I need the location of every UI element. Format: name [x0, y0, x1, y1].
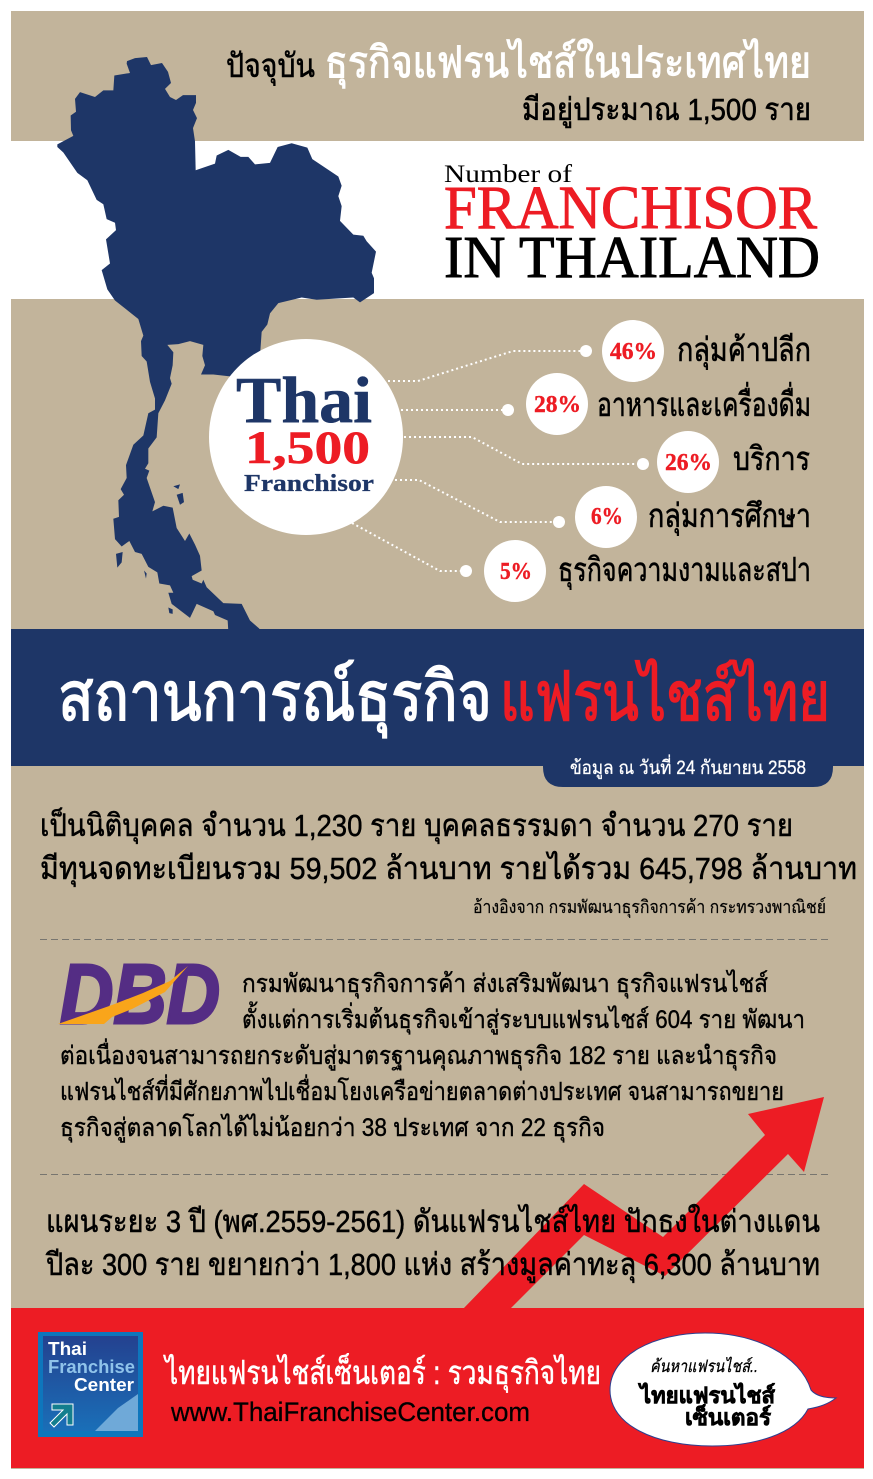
- text block: DBD description: ธุรกิจสู่ตลาดโลกได้ไม่น้อยกว่า 38 ประเทศ จาก 22 ธุรกิจ: [60, 1113, 605, 1143]
- central circle: Thai 1,500 Franchisor: Thai: [236, 364, 372, 437]
- stat: 46% retail: 46%: [610, 339, 657, 365]
- stat: 26% services: 26%: [665, 450, 712, 476]
- arrow: rising red arrow: [463, 1097, 824, 1309]
- stat: 6% education: กลุ่มการศึกษา: [648, 497, 811, 536]
- text block: DBD description: ต่อเนื่องจนสามารถยกระดับสู่มาตรฐานคุณภาพธุรกิจ 182 ราย และนำธุรกิจ: [60, 1038, 777, 1071]
- stat: 5% beauty and spa: 5%: [500, 559, 532, 585]
- callout: speech bubble: เซ็นเตอร์: [685, 1403, 771, 1430]
- title: Thai header: [226, 38, 811, 128]
- text block: DBD description: แฟรนไชส์ที่มีศักยภาพไปเชื่อมโยงเครือข่ายตลาดต่างประเทศ จนสามารถขยาย: [60, 1074, 784, 1106]
- stat: 46% retail: กลุ่มค้าปลีก: [677, 331, 811, 370]
- title: Number of Franchisor in Thailand: [444, 161, 820, 290]
- stat: 46% retail: [602, 320, 811, 382]
- heading: current situation headline: สถานการณ์ธุรกิจ: [58, 659, 492, 738]
- central circle: Thai 1,500 Franchisor: Franchisor: [244, 471, 374, 497]
- panel: red footer band: [11, 1308, 864, 1468]
- callout: speech bubble: ค้นหาแฟรนไชส์..: [650, 1356, 758, 1376]
- icon: Thai Franchise Center logo: Thai: [48, 1339, 87, 1359]
- icon: Thai Franchise Center logo: Center: [74, 1375, 134, 1395]
- text block: registration and revenue: [40, 807, 857, 918]
- panel: tan details area: [11, 766, 864, 1309]
- text block: DBD description: [60, 969, 805, 1143]
- title: Number of Franchisor in Thailand: FRANCHISOR: [444, 175, 817, 242]
- title: Number of Franchisor in Thailand: Number of: [444, 161, 573, 188]
- panel: tan breakdown band: [11, 299, 864, 629]
- stat: 28% food and drink: 28%: [534, 392, 581, 418]
- title: Thai header: มีอยู่ประมาณ 1,500 ราย: [522, 92, 811, 128]
- title: Thai header: ปัจจุบัน: [226, 47, 315, 86]
- title: Number of Franchisor in Thailand: IN THAILAND: [444, 224, 820, 290]
- text block: registration and revenue: เป็นนิติบุคคล จำนวน 1,230 ราย บุคคลธรรมดา จำนวน 270 ราย: [40, 807, 793, 845]
- heading: current situation headline: [58, 658, 830, 738]
- text block: DBD description: กรมพัฒนาธุรกิจการค้า ส่งเสริมพัฒนา ธุรกิจแฟรนไชส์: [242, 969, 768, 999]
- central circle: Thai 1,500 Franchisor: 1,500: [245, 422, 370, 474]
- stat: 6% education: [575, 486, 811, 548]
- icon: Thai Franchise Center logo: Franchise: [48, 1357, 135, 1377]
- panel: navy headline band: [11, 629, 864, 766]
- connector end dots: [460, 345, 649, 577]
- icon: DBD logo: DBD: [60, 947, 220, 1041]
- text block: three-year plan: [45, 1204, 820, 1284]
- title: Thai header: ธุรกิจแฟรนไชส์ในประเทศไทย: [325, 38, 811, 89]
- callout: speech bubble: [610, 1333, 836, 1446]
- callout: speech bubble: ไทยแฟรนไชส์: [638, 1382, 776, 1408]
- map of Thailand: [57, 57, 376, 632]
- dotted connector lines: [352, 351, 643, 571]
- stat: 26% services: [657, 431, 810, 493]
- icon: Thai Franchise Center logo: [38, 1332, 143, 1437]
- stat: 28% food and drink: [526, 373, 811, 435]
- stat: 5% beauty and spa: [484, 540, 811, 602]
- text block: registration and revenue: อ้างอิงจาก กรมพัฒนาธุรกิจการค้า กระทรวงพาณิชย์: [473, 897, 826, 918]
- footer text: site name and URL: www.ThaiFranchiseCenter.com: [170, 1397, 530, 1427]
- panel: top tan header band: [11, 11, 864, 141]
- date tab: ข้อมูล ณ วันที่ 24 กันยายน 2558: [570, 754, 806, 779]
- central circle: Thai 1,500 Franchisor: [209, 339, 403, 535]
- date tab: [543, 754, 833, 787]
- footer text: site name and URL: ไทยแฟรนไชส์เซ็นเตอร์ : รวมธุรกิจไทย: [163, 1353, 601, 1393]
- stat: 26% services: บริการ: [733, 440, 810, 477]
- stat: 6% education: 6%: [591, 504, 623, 530]
- text block: DBD description: ตั้งแต่การเริ่มต้นธุรกิจเข้าสู่ระบบแฟรนไชส์ 604 ราย พัฒนา: [242, 1001, 805, 1035]
- footer text: site name and URL: [163, 1353, 601, 1427]
